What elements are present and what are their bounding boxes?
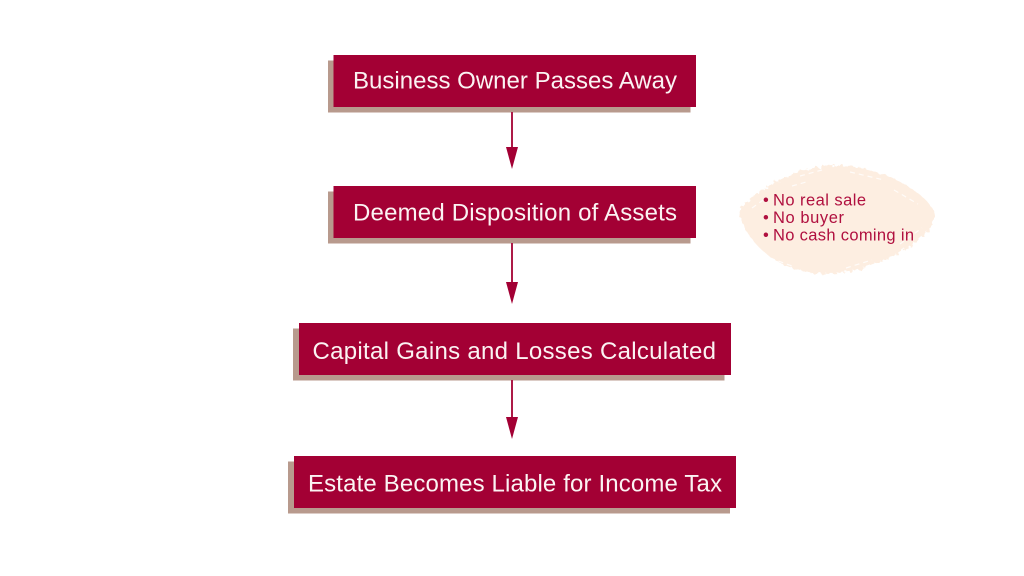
- callout: no real sale notes: •: [763, 209, 769, 227]
- flow step 4: Estate Becomes Liable for Income Tax: [288, 456, 736, 514]
- flow step 1: Business Owner Passes Away: Business Owner Passes Away: [353, 68, 677, 94]
- callout: no real sale notes: •: [763, 226, 769, 244]
- flow step 2: Deemed Disposition of Assets: Deemed Disposition of Assets: [353, 200, 677, 226]
- callout: no real sale notes: •: [763, 192, 769, 210]
- flow step 2: Deemed Disposition of Assets: [328, 186, 696, 244]
- flow step 1: Business Owner Passes Away: [328, 55, 696, 112]
- callout: no real sale notes: [739, 165, 934, 273]
- arrow: step 1 to step 2: [506, 112, 518, 169]
- arrow: step 3 to step 4: [506, 380, 518, 439]
- callout: no real sale notes: No real sale: [773, 192, 866, 210]
- arrow: step 2 to step 3: [506, 243, 518, 304]
- flow step 3: Capital Gains and Losses Calculated: Capital Gains and Losses Calculated: [312, 338, 716, 365]
- callout: no real sale notes: No cash coming in: [773, 226, 914, 244]
- flow step 4: Estate Becomes Liable for Income Tax: Estate Becomes Liable for Income Tax: [308, 470, 722, 498]
- callout: no real sale notes: No buyer: [773, 209, 844, 227]
- flow step 3: Capital Gains and Losses Calculated: [293, 323, 731, 380]
